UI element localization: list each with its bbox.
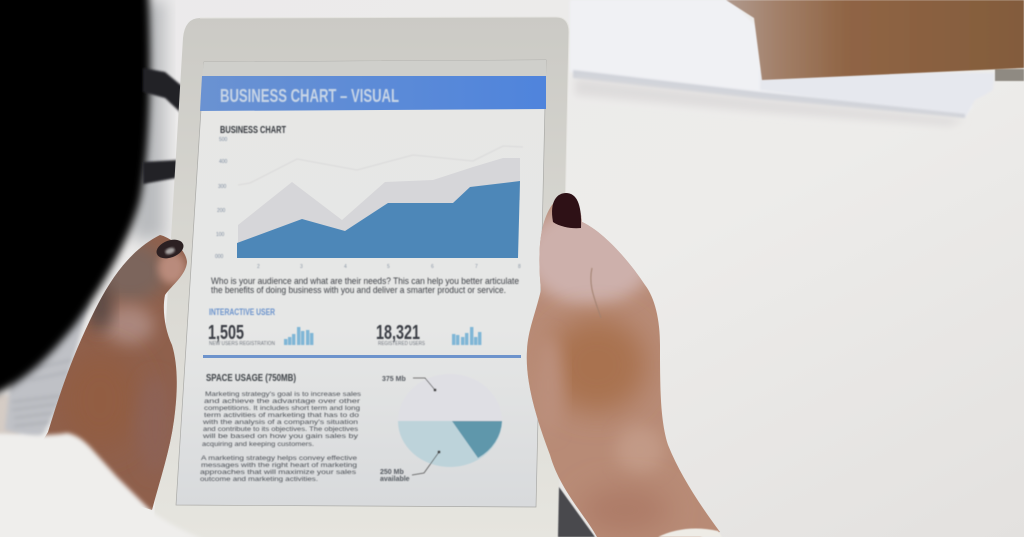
blurred skin near shoulder [0,395,20,435]
body copy [200,391,361,483]
grey area series [238,158,520,250]
body copy: term activities of marketing that has to do [204,412,360,419]
body copy: will be based on how you gain sales by [202,433,359,440]
y axis labels: 400 [219,159,228,165]
x axis labels: 3 [300,264,303,270]
blurred shade beside hair [130,0,165,240]
x axis labels: 6 [431,264,434,270]
x axis labels [257,264,521,270]
space usage heading: SPACE USAGE (750MB) [206,372,296,384]
grey strip under folder [995,69,1024,81]
title: BUSINESS CHART – VISUAL [220,86,399,106]
label 250 Mb available [380,450,440,483]
brown folder [726,0,1024,80]
y axis labels: 200 [217,208,226,214]
body copy: acquiring and keeping customers. [202,441,314,448]
description text: the benefits of doing business with you and deliver a smarter product or service. [211,285,506,295]
header band [200,76,546,111]
white shirt [0,433,205,537]
left hand [44,235,187,510]
dark hair [0,0,150,400]
interactive user heading: INTERACTIVE USER [209,307,275,317]
blurred newspaper [5,300,90,440]
body copy: messages with the right heart of marketing [201,462,358,469]
body copy: outcome and marketing activities. [200,476,318,483]
right fingernail [552,193,581,228]
pie chart [380,374,502,483]
divider [203,355,521,358]
label 375 Mb: 375 Mb [382,376,406,383]
stat: new users: NEW USERS REGISTRATION [209,341,275,347]
dark gap under tablet [558,487,595,537]
x axis labels: 2 [257,264,260,270]
y axis labels: 000 [215,254,224,260]
x axis labels: 7 [475,264,478,270]
pie wedge [452,421,502,458]
tablet [153,17,569,537]
stat: new users [208,322,275,347]
white sleeve [658,529,722,537]
area chart [215,137,523,270]
x axis labels: 5 [387,264,390,270]
x axis labels: 4 [344,264,347,270]
top line series [238,146,523,185]
y axis labels: 500 [219,137,228,143]
chart heading: BUSINESS CHART [220,125,286,136]
stacked papers [570,0,995,126]
thumb crease [591,268,601,318]
description text: Who is your audience and what are their needs? This can help you better articulate [211,276,519,286]
y axis labels: 300 [218,184,227,190]
body copy: Marketing strategy's goal is to increase sales [205,391,361,398]
stat: registered users: 18,321 [376,322,420,344]
mini bars: registered users [452,327,481,345]
description text [211,276,519,295]
stat: registered users: REGISTERED USERS [378,341,426,347]
y axis labels: 100 [216,232,225,238]
label 250 Mb available: 250 Mb [380,469,404,476]
tablet body [153,17,569,537]
tablet screen [176,60,546,507]
body copy: competitions. It includes short term and long [204,405,361,412]
label 250 Mb available: available [380,476,410,483]
body copy: and contribute to its objectives. The objectives [203,426,358,433]
body copy: A marketing strategy helps convey effective [201,455,358,462]
chair arm behind tablet [143,68,182,184]
x axis labels: 8 [518,264,521,270]
body copy: with the analysis of a company's situation [202,419,359,426]
body copy: approaches that will maximize your sales [200,469,356,476]
mini bars: new users [284,327,313,345]
left fingernail [154,236,186,262]
body copy: and achieve the advantage over other [204,398,360,405]
blue area series [237,181,520,258]
right hand [520,190,730,537]
stat: new users: 1,505 [208,322,244,344]
y axis labels [215,137,228,260]
